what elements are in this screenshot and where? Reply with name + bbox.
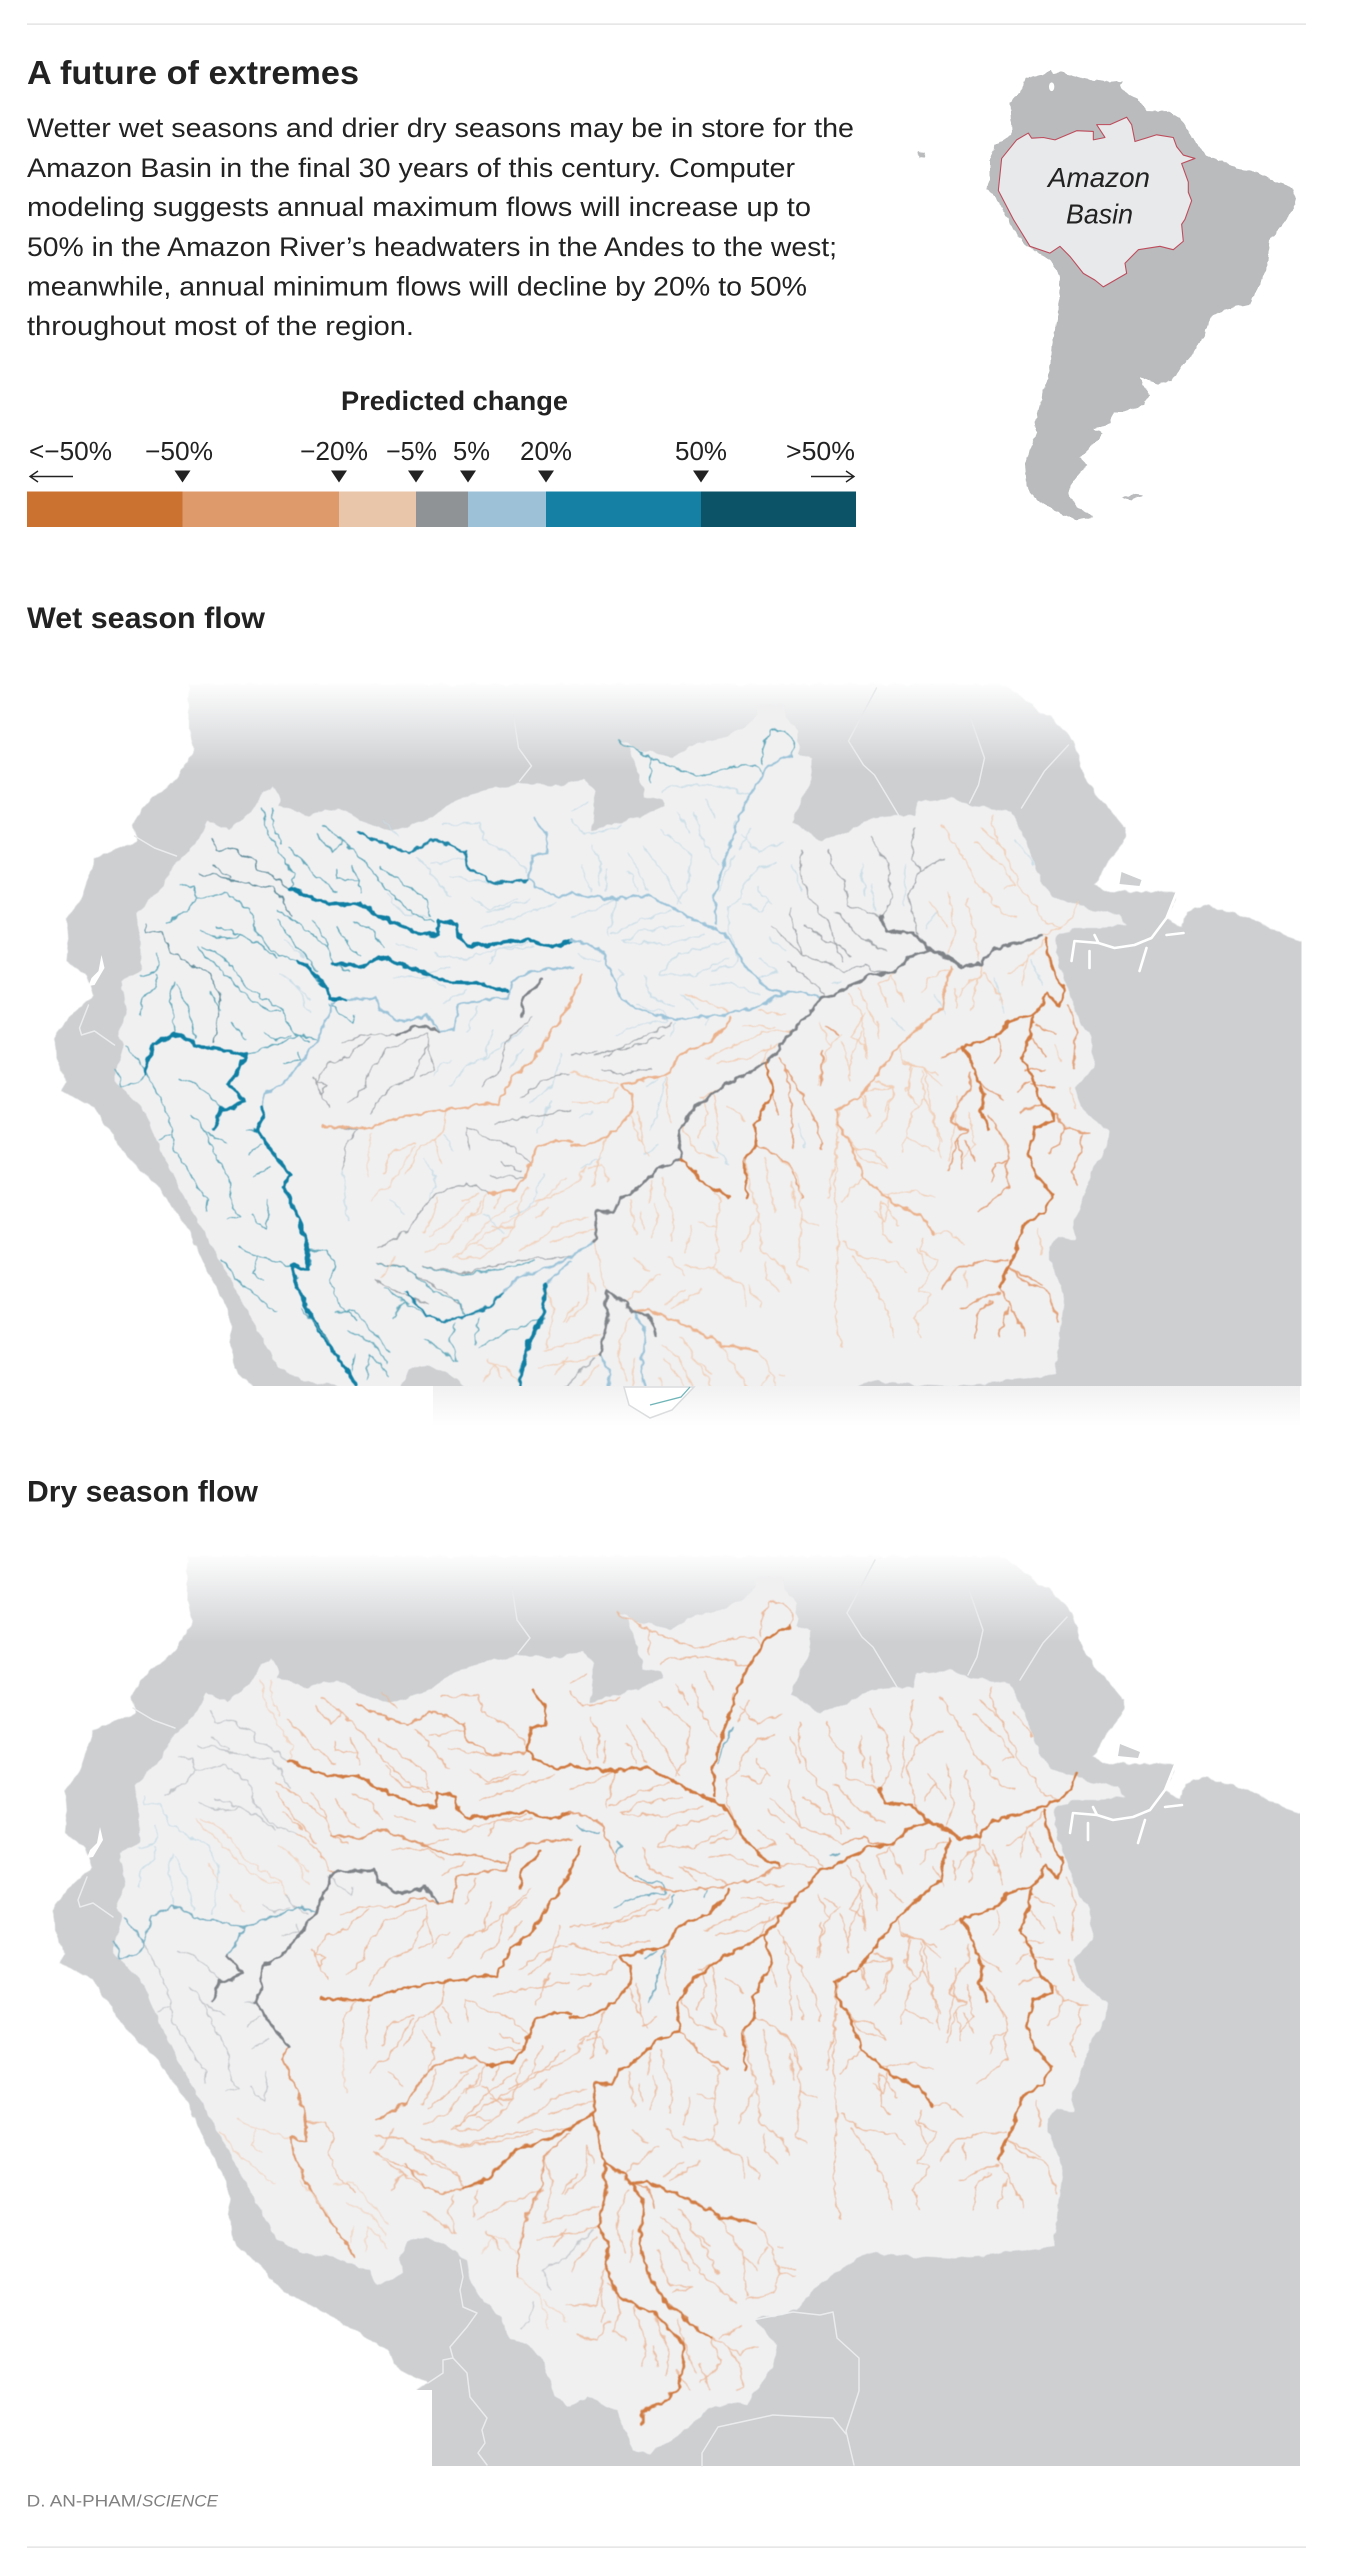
inset map: South America with Amazon Basin	[918, 71, 1296, 520]
intro text block	[27, 113, 854, 341]
arrow: below -50%	[30, 471, 73, 482]
credit line: SCIENCE	[142, 2492, 219, 2511]
dry map: basin	[113, 1576, 1125, 2453]
legend tick markers	[174, 470, 709, 482]
wet map: top fade	[187, 682, 1078, 754]
legend tick labels: 50%	[675, 436, 727, 466]
dry map: land	[52, 1556, 1330, 2490]
wet map: rivers	[114, 728, 1091, 1386]
arrow: above 50%	[811, 471, 854, 482]
legend tick labels: 20%	[520, 436, 572, 466]
legend tick labels: −5%	[386, 436, 437, 466]
legend tick labels: −50%	[145, 436, 213, 466]
inset label: Amazon Basin: Amazon	[1046, 162, 1150, 193]
faded strip below the wet map	[433, 1386, 1300, 1426]
legend tick labels: >50%	[786, 436, 855, 466]
credit line: D. AN-PHAM/	[27, 2492, 142, 2511]
panel: wet season map	[54, 687, 1302, 1419]
heading: dry season flow: Dry season flow	[27, 1476, 259, 1509]
wet map: basin	[114, 722, 1126, 1386]
intro text block: meanwhile, annual minimum flows will decline by 20% to 50%	[27, 272, 807, 302]
wet map: land	[54, 695, 1302, 1386]
continent	[918, 71, 1296, 520]
inset label: Amazon Basin: Basin	[1066, 198, 1133, 230]
legend tick labels: 5%	[453, 436, 490, 466]
legend tick labels	[29, 436, 855, 466]
intro text block: Wetter wet seasons and drier dry seasons may be in store for the	[27, 113, 854, 143]
Lake Maracaibo	[1049, 82, 1054, 91]
intro text block: 50% in the Amazon River’s headwaters in the Andes to the west;	[27, 232, 837, 262]
intro text block: throughout most of the region.	[27, 311, 414, 341]
legend tick labels: <−50%	[29, 436, 112, 466]
legend: predicted change	[27, 386, 856, 527]
Amazon Basin outline	[998, 117, 1195, 287]
credit line	[27, 2492, 219, 2511]
legend colour bar	[27, 492, 856, 527]
wet map: borders and estuary	[78, 688, 1185, 1046]
intro text block: Amazon Basin in the final 30 years of this century. Computer	[27, 153, 795, 183]
dry map: top fade	[170, 1552, 1170, 1642]
dry map: borders and estuary	[78, 1560, 1182, 2466]
dry map: rivers	[115, 1600, 1087, 2423]
legend tick labels: −20%	[300, 436, 368, 466]
intro text block: modeling suggests annual maximum flows will increase up to	[27, 192, 811, 222]
legend heading: Predicted change	[341, 386, 568, 416]
panel: dry season map	[52, 1552, 1330, 2490]
inset label: Amazon Basin	[1046, 162, 1150, 230]
heading: wet season flow: Wet season flow	[27, 602, 266, 635]
title: A future of extremes	[27, 54, 359, 91]
